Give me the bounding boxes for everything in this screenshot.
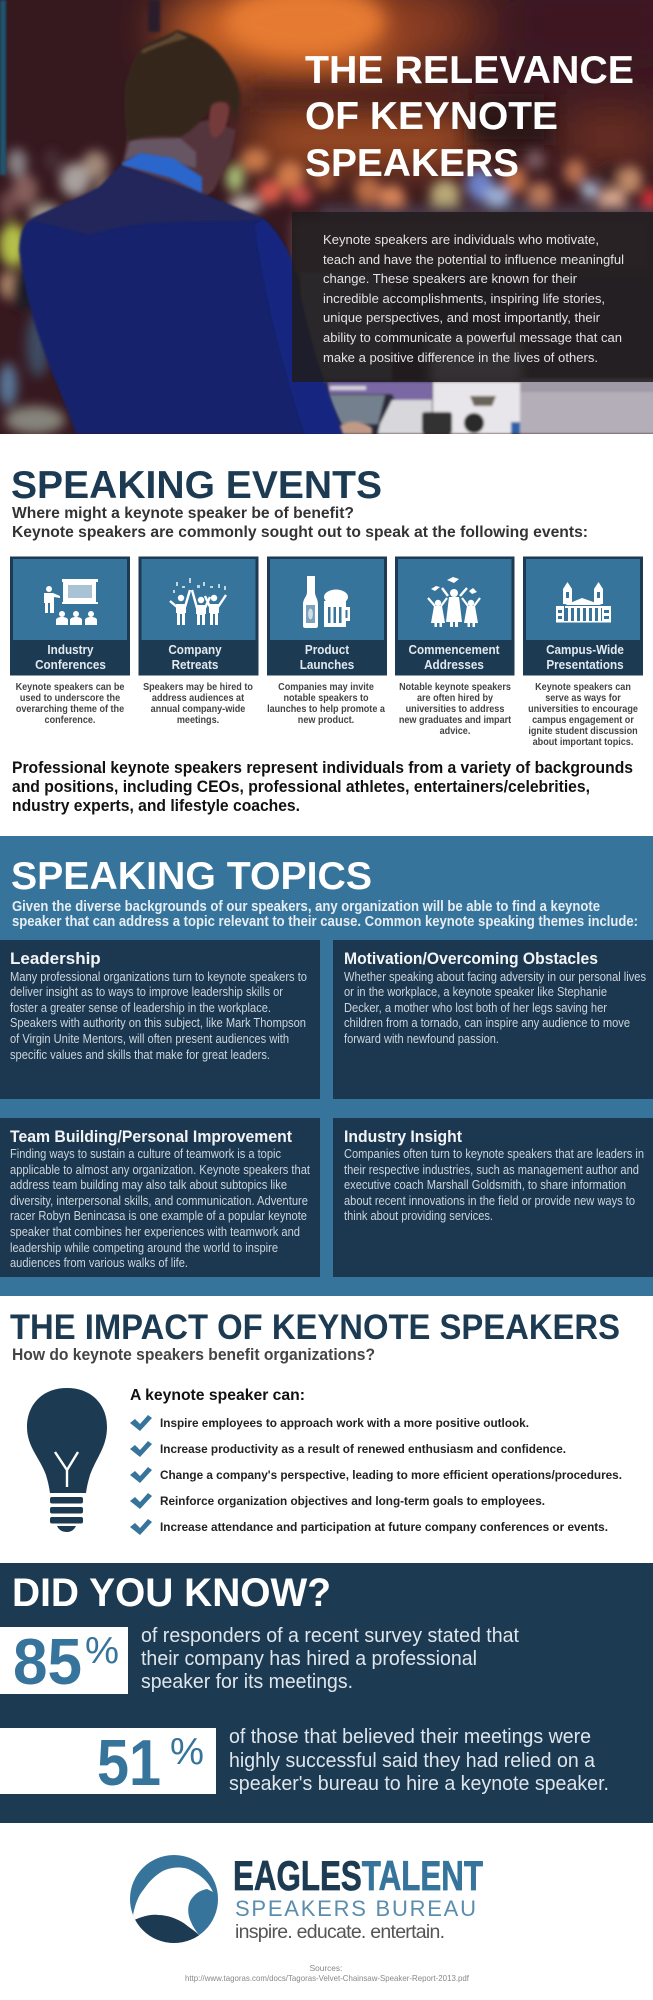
card description: industry conferences: overarching theme of the [16,704,125,715]
heading: SPEAKING EVENTS [11,464,382,507]
card description: product launches: launches to help promote a [267,704,386,715]
icon: check marks [130,1415,152,1535]
hero title: OF KEYNOTE [305,95,558,138]
label: Product [305,642,350,657]
card description: company retreats: annual company-wide [151,704,246,715]
section: impact of keynote speakers [10,1308,622,1535]
panel: motivation: Motivation/Overcoming Obstacles [344,949,598,968]
panel: team building: speaker that combines her experiences with teamwork and [10,1225,300,1239]
panel: industry insight: think about providing services. [344,1209,493,1223]
benefits list [160,1416,622,1534]
panel: leadership: of Virgin Unite Mentors, will often present audiences with [10,1032,289,1046]
card description: commencement addresses: Notable keynote speakers [399,682,511,693]
stat: 85%: speaker for its meetings. [141,1670,353,1693]
label: Company [168,642,222,657]
stat: 85%: of responders of a recent survey stated that [141,1624,519,1647]
label [168,642,222,672]
panel: team building: leadership while competing around the world to inspire [10,1241,278,1255]
card description: campus-wide presentations: campus engagement or [532,715,634,726]
card description: commencement addresses: new graduates and impart [399,715,512,726]
panel: team building: racer Robyn Benincasa is one example of a popular keynote [10,1209,307,1223]
card description: industry conferences: used to underscore the [20,693,121,704]
label: Campus-Wide [546,642,624,657]
intro text: incredible accomplishments, inspiring life stories, [323,291,605,306]
card description: company retreats: Speakers may be hired to [143,682,253,693]
icon: presenter and audience [44,579,98,625]
label [35,642,106,672]
subheading [12,505,588,541]
card description: campus-wide presentations: universities to encourage [528,704,639,715]
card description: industry conferences: Keynote speakers can be [16,682,125,693]
benefits list: Change a company's perspective, leading to more efficient operations/procedures. [160,1468,622,1482]
label: Addresses [424,657,484,672]
intro text [12,899,638,930]
hero photo: blurred conference audience and speaker [0,0,653,434]
intro text: unique perspectives, and most importantly, their [323,310,601,325]
tagline: inspire. educate. entertain. [235,1921,445,1943]
logo: eagles talent [130,1855,483,1943]
section: speaking topics [0,836,653,1296]
hand [340,422,372,434]
stat: 51%: of those that believed their meetings were [229,1725,591,1748]
intro dark panel [292,212,653,382]
intro text: Given the diverse backgrounds of our speakers, any organization will be able to find a keynote [12,899,600,915]
audience blur [0,148,653,434]
benefits list: Inspire employees to approach work with a more positive outlook. [160,1416,529,1430]
label [546,642,624,672]
section: speaking events [10,464,643,815]
intro text: change. These speakers are known for their [323,271,578,286]
backgrounds paragraph: ndustry experts, and lifestyle coaches. [12,797,300,815]
label: Launches [300,657,354,672]
panel: team building: Finding ways to sustain a culture of teamwork is a topic [10,1147,281,1161]
card description: industry conferences: conference. [45,715,96,726]
card description: campus-wide presentations [528,682,639,748]
stat: 85%: 85 [13,1625,82,1698]
intro text: teach and have the potential to influence meaningful [323,252,624,267]
panel: industry insight: Industry Insight [344,1127,462,1146]
card description: product launches: notable speakers to [283,693,369,704]
under-panel shapes [287,216,526,384]
sources: http://www.tagoras.com/docs/Tagoras-Velvet-Chainsaw-Speaker-Report-2013.pdf [185,1973,470,1983]
panel: leadership: Speakers with authority on this subject, like Mark Thompson [10,1016,306,1030]
bureau name: SPEAKERS BUREAU [235,1896,476,1921]
icon: eagle emblem [130,1855,218,1943]
icon: bottle and beer mug [303,576,350,628]
hair [124,30,240,142]
sources: Sources: [310,1963,342,1973]
card description: product launches [267,682,386,726]
hero title: SPEAKERS [305,142,519,185]
panel: leadership [0,940,320,1099]
card description: campus-wide presentations: ignite student discussion [528,726,638,737]
hero title: THE RELEVANCE [305,49,634,92]
card description: product launches: new product. [298,715,354,726]
label [300,642,354,672]
section: did you know [0,1563,653,1823]
stat: 51%: % [170,1731,204,1773]
card description: campus-wide presentations: Keynote speakers can [535,682,631,693]
hero title [305,56,632,176]
benefits list: Increase attendance and participation at future company conferences or events. [160,1520,608,1534]
subheading: Where might a keynote speaker be of benefit? [12,505,354,522]
card description: industry conferences [16,682,125,726]
intro text: Keynote speakers are individuals who motivate, [323,232,599,247]
stat: 51% [0,1725,609,1799]
panel: leadership: foster a greater sense of leadership in the workplace. [10,1001,271,1015]
backgrounds paragraph: Professional keynote speakers represent individuals from a variety of backgrounds [12,759,633,777]
label: Presentations [546,657,624,672]
label: Commencement [409,642,500,657]
panel: motivation: Decker, a mother who lost both of her legs saving her [344,1001,607,1015]
benefits list: Reinforce organization objectives and long-term goals to employees. [160,1494,545,1508]
intro text: make a positive difference in the lives of others. [323,350,598,365]
stat: 85%: their company has hired a professional [141,1647,477,1670]
card description: campus-wide presentations: about important topics. [533,737,634,748]
speaker figure [19,30,372,434]
subheading: Keynote speakers are commonly sought out to speak at the following events: [12,524,588,541]
card description: commencement addresses [399,682,512,737]
panel: leadership: specific values and skills that make for great leaders. [10,1048,270,1062]
card: company retreats [138,556,258,676]
stat: 85% [0,1624,519,1698]
label [409,642,500,672]
label: Retreats [172,657,218,672]
panel: leadership: Many professional organizations turn to keynote speakers to [10,970,307,984]
panel: motivation: forward with newfound passion. [344,1032,499,1046]
card description: commencement addresses: are often hired by [417,693,494,704]
card description: campus-wide presentations: serve as ways for [545,693,621,704]
stat: 51%: speaker's bureau to hire a keynote speaker. [229,1772,609,1795]
teal strip [0,0,6,175]
panel: team building: Team Building/Personal Improvement [10,1127,292,1146]
card description: company retreats: address audiences at [152,693,245,704]
card description: commencement addresses: universities to address [406,704,504,715]
heading: THE IMPACT OF KEYNOTE SPEAKERS [10,1308,620,1347]
label: Industry [47,642,94,657]
heading: DID YOU KNOW? [12,1571,331,1615]
stat: 51%: highly successful said they had relied on a [229,1749,596,1772]
card: campus-wide presentations [523,556,643,676]
jacket [19,166,343,434]
benefits list: Increase productivity as a result of renewed enthusiasm and confidence. [160,1442,566,1456]
heading: SPEAKING TOPICS [11,855,372,898]
card: industry conferences [10,556,130,676]
hero banner [0,0,653,434]
panel: team building: audiences from various walks of life. [10,1256,188,1270]
list heading: A keynote speaker can: [130,1387,305,1404]
card: product launches [267,556,387,676]
card description: company retreats: meetings. [177,715,219,726]
backgrounds paragraph [12,759,633,815]
card description: commencement addresses: advice. [440,726,471,737]
card: commencement addresses [395,556,514,676]
backgrounds paragraph: and positions, including CEOs, professional athletes, entertainers/celebrities, [12,778,590,796]
shirt collar [122,153,202,193]
icon: cheering group [170,578,226,625]
hair highlight [142,32,188,54]
panel: motivation: or in the workplace, a keynote speaker like Stephanie [344,985,607,999]
panel: team building: applicable to almost any organization. Keynote speakers that [10,1163,310,1177]
stat: 51%: 51 [97,1726,161,1799]
wordmark: EAGLESTALENT [233,1852,483,1899]
panel: leadership: Leadership [10,949,101,968]
panel: motivation [333,940,653,1099]
icon: campus building [556,582,611,622]
panel: team building: diversity, interpersonal skills, and communication. Adventure [10,1194,308,1208]
icon: light bulb [27,1388,107,1532]
intro text [323,232,624,365]
icon: graduates throwing caps [428,577,480,627]
sources [185,1963,470,1983]
subheading: How do keynote speakers benefit organizations? [12,1346,375,1364]
neck [122,120,236,198]
panel: team building: address team building may also talk about subtopics like [10,1178,287,1192]
intro text: ability to communicate a powerful message that can [323,330,622,345]
label: Conferences [35,657,106,672]
card description: company retreats [143,682,253,726]
card description: product launches: Companies may invite [278,682,374,693]
lower right floor and lectern [325,378,653,434]
panel: team building [0,1118,320,1277]
stat: 85%: % [85,1630,119,1672]
panel: industry insight [333,1118,653,1277]
ear [209,102,229,138]
panel: leadership: deliver insight as to ways to improve leadership skills or [10,985,283,999]
